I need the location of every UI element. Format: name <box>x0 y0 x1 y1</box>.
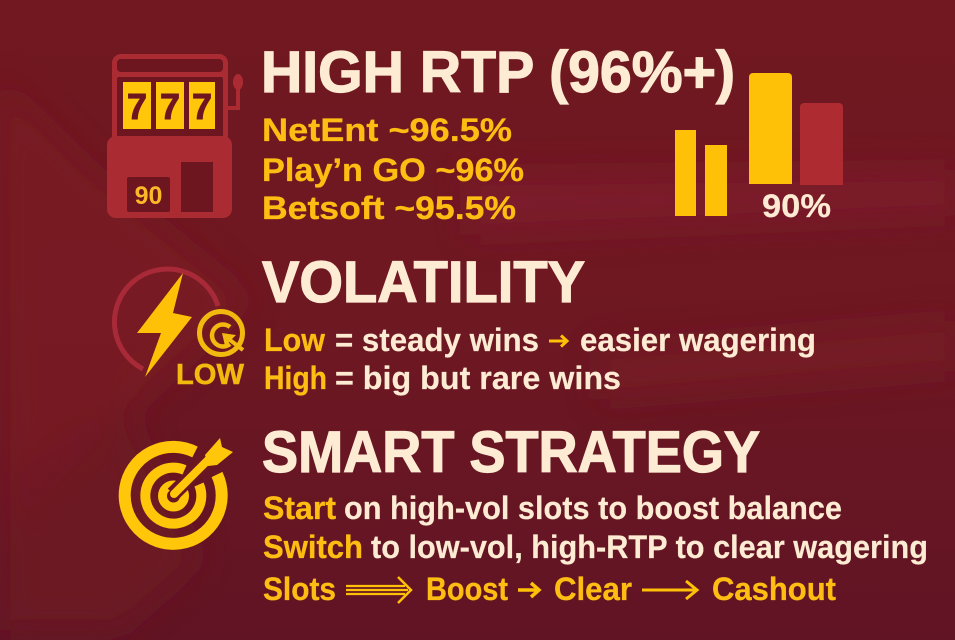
heading: volatility: VOLATILITY <box>262 250 585 315</box>
flow: slots to cashout: Slots <box>263 571 336 607</box>
heading: smart strategy: SMART STRATEGY <box>262 420 760 485</box>
text block: volatility high: = big but rare wins <box>335 360 621 396</box>
icon: target with arrow <box>125 438 233 544</box>
text block: start step: on high-vol slots to boost balance <box>344 490 842 526</box>
text block: start step: Start <box>263 490 336 526</box>
text block: volatility low: easier wagering <box>580 322 816 358</box>
icon: lightning bolt with gauge and target: LOW <box>176 359 245 391</box>
flow: slots to cashout: Cashout <box>712 571 836 607</box>
text block: volatility low: = steady wins <box>335 322 539 358</box>
arrow: slots to boost <box>346 586 408 594</box>
icon: slot machine: 7 <box>160 86 180 127</box>
text block: RTP providers: Betsoft ~95.5% <box>262 190 516 226</box>
heading: high RTP: HIGH RTP (96%+) <box>261 40 735 105</box>
text block: volatility low: Low <box>264 322 325 358</box>
icon: slot machine: 90 <box>135 182 162 210</box>
text block: switch step: to low-vol, high-RTP to clear wagering <box>371 529 928 565</box>
bar chart: RTP comparison: 90% <box>762 188 831 224</box>
bar chart: RTP comparison <box>675 73 843 224</box>
icon: slot machine: 7 <box>127 86 147 127</box>
icon: lightning bolt with gauge and target <box>114 269 245 391</box>
text block: RTP providers: NetEnt ~96.5% <box>262 112 512 148</box>
flow: slots to cashout: Clear <box>554 571 632 607</box>
flow: slots to cashout <box>263 571 836 607</box>
text block: volatility low <box>264 322 816 358</box>
text block: volatility high: High <box>264 360 327 396</box>
icon: slot machine <box>107 54 243 218</box>
flow: slots to cashout: Boost <box>426 571 508 607</box>
text block: RTP providers: Play’n GO ~96% <box>262 152 524 188</box>
text block: switch step: Switch <box>263 529 363 565</box>
icon: slot machine: 7 <box>192 86 212 127</box>
text block: RTP providers <box>262 112 524 226</box>
